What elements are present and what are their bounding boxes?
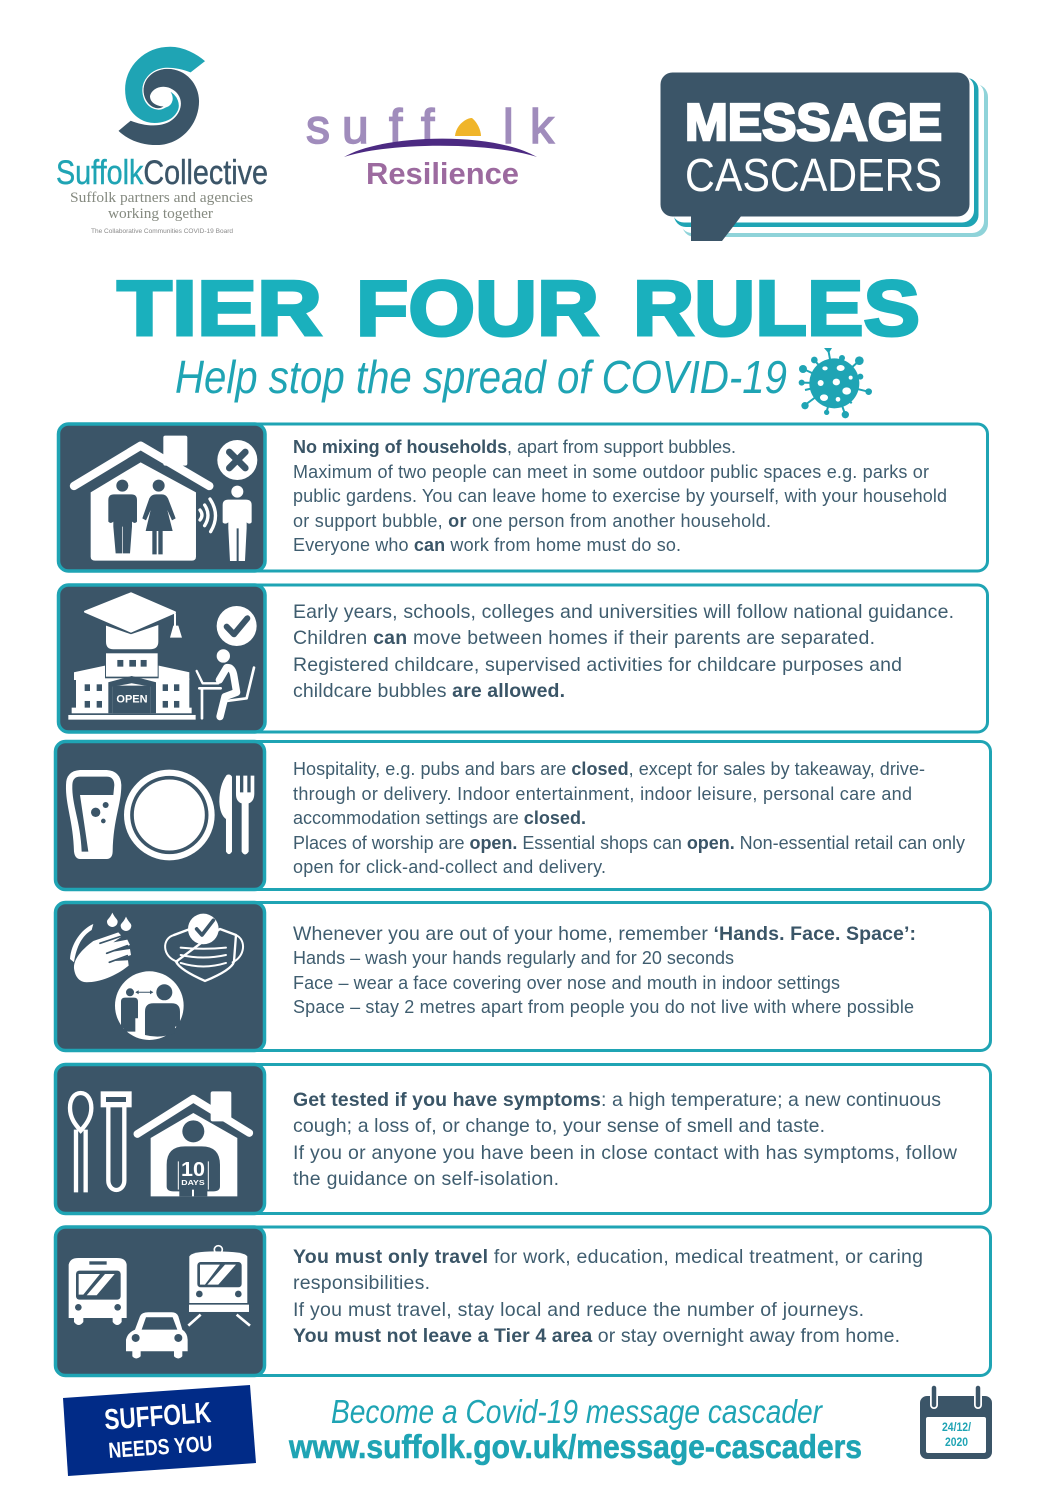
text: education rules: Early years, schools, colleges and universities will follow national guidance.: [293, 601, 954, 623]
text: testing rules: cough; a loss of, or change to, your sense of smell and taste.: [293, 1115, 825, 1137]
icon: school and person at desk: OPEN: [116, 693, 148, 705]
text: hospitality rules: [293, 759, 965, 877]
badge: Suffolk needs you: NEEDS YOU: [108, 1431, 213, 1463]
text: hands face space rules: Face – wear a face covering over nose and mouth in indoor settings: [293, 973, 840, 993]
text: travel rules: You must only travel for work, education, medical treatment, or caring: [293, 1246, 923, 1268]
icon: swab, test tube and isolating at home: DAYS: [181, 1180, 205, 1187]
logo: Message Cascaders speech bubble: MESSAGE: [685, 94, 942, 152]
call to action: Become a Covid-19 message cascader: [331, 1393, 824, 1430]
panel: no mixing of households: [58, 424, 988, 571]
text: education rules: [293, 601, 954, 702]
text: travel rules: responsibilities.: [293, 1272, 430, 1294]
text: travel rules: If you must travel, stay local and reduce the number of journeys.: [293, 1299, 864, 1321]
icon: pint, plate and cutlery: [66, 770, 254, 860]
badge: Suffolk needs you: [63, 1385, 256, 1476]
panel: testing and self-isolation: [56, 1064, 990, 1214]
logo: Suffolk Collective: Suffolk partners and agencies: [70, 190, 253, 206]
text: hands face space rules: Space – stay 2 metres apart from people you do not live with where possible: [293, 997, 914, 1017]
icon: swab, test tube and isolating at home: [70, 1091, 249, 1196]
icon: bus, car and train: [69, 1246, 250, 1358]
title: TIER: [117, 264, 322, 352]
call to action: [288, 1393, 862, 1465]
icon: calendar with date: 2020: [945, 1435, 968, 1449]
text: households rules: or support bubble, or one person from another household.: [293, 511, 771, 531]
text: travel rules: [293, 1246, 923, 1347]
panel: hands face space: [56, 902, 990, 1050]
logo: Suffolk Resilience: Resilience: [366, 156, 519, 191]
text: testing rules: the guidance on self-isolation.: [293, 1168, 559, 1190]
logo: Suffolk Collective: The Collaborative Communities COVID-19 Board: [91, 229, 233, 235]
title: [117, 264, 920, 352]
logo: Message Cascaders speech bubble: CASCADERS: [685, 149, 942, 201]
logo: Suffolk Collective: SuffolkCollective: [56, 154, 268, 192]
icon: calendar with date: 24/12/: [942, 1420, 972, 1434]
panel: hospitality and retail: [56, 742, 990, 890]
text: households rules: public gardens. You can leave home to exercise by yourself, with your household: [293, 486, 947, 506]
text: hands face space rules: [293, 923, 916, 1017]
text: hands face space rules: Hands – wash your hands regularly and for 20 seconds: [293, 948, 734, 968]
text: testing rules: [293, 1089, 958, 1190]
text: testing rules: If you or anyone you have been in close contact with has symptoms, follow: [293, 1142, 958, 1164]
logo: Suffolk Collective: working together: [108, 206, 213, 222]
text: education rules: Children can move between homes if their parents are separated.: [293, 627, 875, 649]
icon: virus: [799, 348, 872, 418]
subtitle: Help stop the spread of COVID-19: [175, 351, 787, 403]
text: hospitality rules: through or delivery. Indoor entertainment, indoor leisure, personal care and: [293, 784, 912, 804]
logo: Suffolk Resilience: suff: [306, 101, 435, 154]
logo: Suffolk Resilience: lk: [503, 101, 555, 154]
text: hospitality rules: open for click-and-collect and delivery.: [293, 857, 606, 877]
text: hospitality rules: Places of worship are open. Essential shops can open. Non-essential retail can only: [293, 833, 965, 853]
text: households rules: [293, 437, 947, 555]
panel: travel: [56, 1227, 990, 1376]
icon: school and person at desk: [68, 593, 257, 720]
text: households rules: No mixing of households, apart from support bubbles.: [293, 437, 736, 457]
title: RULES: [633, 264, 920, 352]
text: hands face space rules: Whenever you are out of your home, remember ‘Hands. Face. Space’:: [293, 923, 916, 945]
title: FOUR: [356, 264, 599, 352]
text: education rules: Registered childcare, supervised activities for childcare purposes and: [293, 654, 902, 676]
logo: Message Cascaders speech bubble: [660, 72, 988, 241]
text: testing rules: Get tested if you have symptoms: a high temperature; a new continuous: [293, 1089, 941, 1111]
text: travel rules: You must not leave a Tier 4 area or stay overnight away from home.: [293, 1325, 900, 1347]
icon: household with visitor excluded: [74, 436, 257, 561]
call to action: www.suffolk.gov.uk/message-cascaders: [288, 1428, 862, 1465]
badge: Suffolk needs you: SUFFOLK: [103, 1397, 212, 1436]
text: households rules: Maximum of two people can meet in some outdoor public spaces e.g. parks or: [293, 462, 929, 482]
icon: hand washing, face mask and distancing: [70, 913, 243, 1040]
icon: calendar with date: [920, 1388, 992, 1459]
text: education rules: childcare bubbles are allowed.: [293, 680, 565, 702]
logo: Suffolk Collective: [56, 46, 268, 235]
text: hospitality rules: accommodation settings are closed.: [293, 808, 586, 828]
text: hospitality rules: Hospitality, e.g. pubs and bars are closed, except for sales by takeaway, drive-: [293, 759, 925, 779]
icon: swab, test tube and isolating at home: 10: [181, 1159, 205, 1181]
panel: education and childcare: [58, 585, 988, 732]
text: households rules: Everyone who can work from home must do so.: [293, 535, 681, 555]
logo: Suffolk Resilience: [306, 101, 555, 191]
